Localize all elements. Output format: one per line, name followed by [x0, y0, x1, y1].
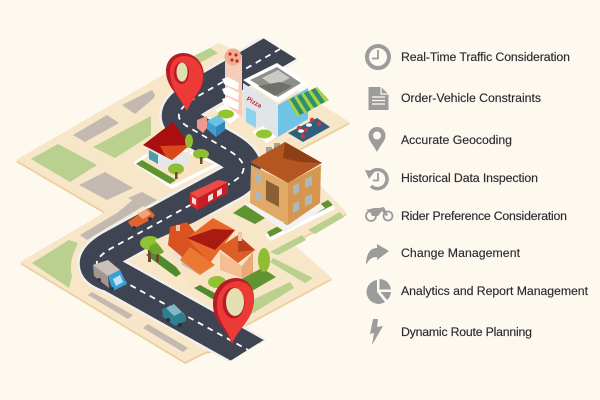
- house block with red roof: [133, 122, 220, 189]
- item: historical data: [365, 170, 538, 189]
- orange car: [128, 208, 155, 230]
- awning: [288, 87, 329, 117]
- icon: lightning bolt: [370, 319, 383, 345]
- pizza sign tower: [222, 48, 242, 117]
- pizza restaurant: [238, 63, 330, 146]
- item: real-time traffic: Real-Time Traffic Consideration: [401, 50, 570, 64]
- item: analytics and report: Analytics and Report Management: [401, 284, 589, 298]
- trees near lower house: [140, 236, 183, 277]
- item: accurate geocoding: Accurate Geocoding: [401, 133, 512, 147]
- icon: pie chart: [367, 279, 391, 304]
- map pin, bottom: [213, 278, 254, 344]
- lower orange-roof house: [155, 215, 276, 301]
- icon: motorbike: [366, 207, 392, 221]
- red bus: [190, 180, 228, 210]
- item: rider preference: Rider Preference Consideration: [401, 209, 567, 223]
- item: change management: [366, 244, 521, 265]
- icon: curved arrow: [366, 244, 389, 265]
- item: change management: Change Management: [401, 246, 521, 260]
- item: dynamic route planning: [370, 319, 532, 345]
- serpentine road: [97, 37, 300, 363]
- isometric city map: [16, 37, 350, 364]
- item: order-vehicle constraints: Order-Vehicle Constraints: [401, 91, 541, 105]
- map ground: [16, 43, 350, 364]
- feature list: [365, 46, 589, 345]
- icon: history clock: [365, 170, 387, 189]
- item: order-vehicle constraints: [368, 87, 541, 110]
- brown apartment building: [233, 142, 335, 241]
- item: analytics and report: [367, 279, 589, 304]
- truck, grey box with blue cab: [93, 260, 127, 291]
- item: historical data: Historical Data Inspection: [401, 171, 538, 185]
- icon: location pin: [368, 127, 386, 152]
- pizza restaurant: Pizza: [245, 96, 263, 110]
- icon: document: [368, 87, 388, 110]
- item: accurate geocoding: [368, 127, 512, 152]
- map parcels: grey lots and green parks: [31, 48, 344, 352]
- infographic canvas: [16, 38, 588, 364]
- map pin, top: [166, 53, 204, 111]
- teal car: [162, 304, 186, 327]
- icon: clock: [367, 46, 389, 68]
- item: real-time traffic: [367, 46, 570, 68]
- planters: [215, 104, 276, 143]
- item: dynamic route planning: Dynamic Route Planning: [401, 325, 532, 339]
- delivery van, blue: [197, 115, 225, 137]
